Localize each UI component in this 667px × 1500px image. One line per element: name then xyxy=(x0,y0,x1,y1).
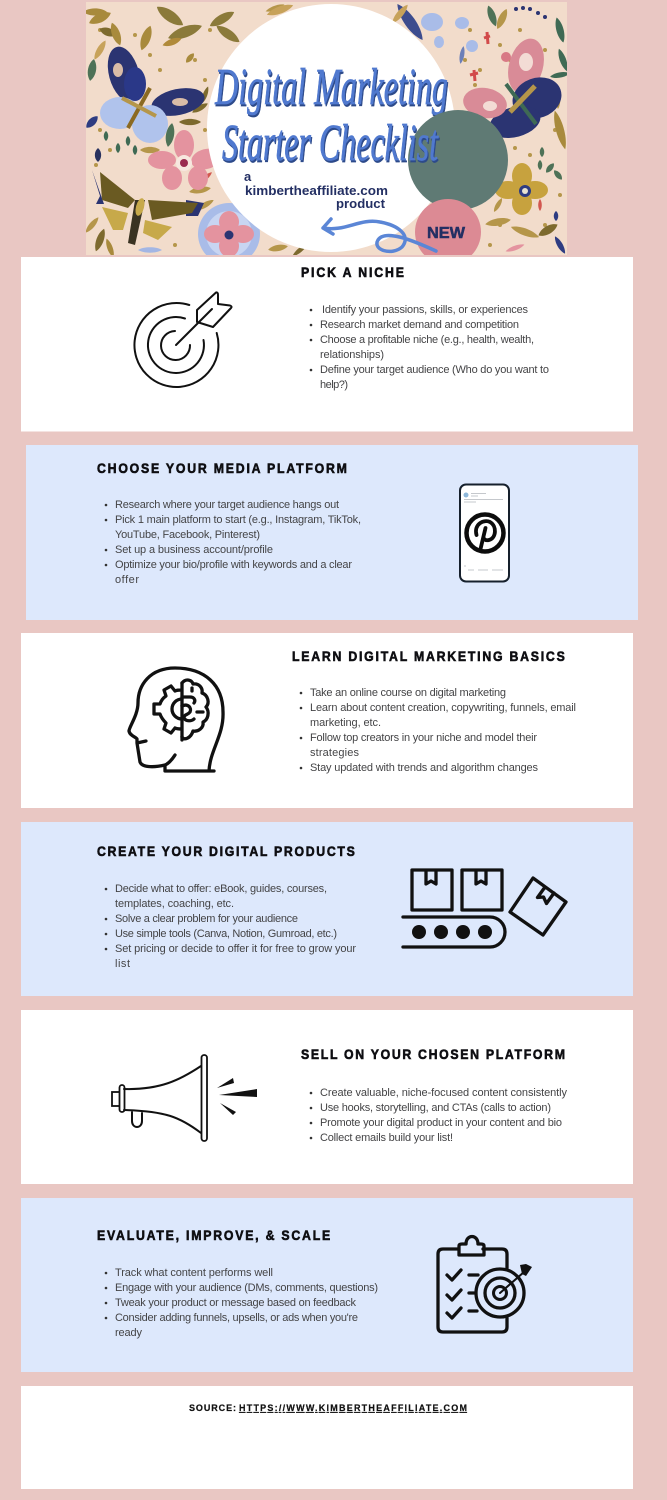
source line: HTTPS://WWW.KIMBERTHEAFFILIATE.COM xyxy=(239,1403,467,1413)
bullet list: Track what content performs well xyxy=(115,1267,273,1279)
grey-green circle xyxy=(408,110,508,210)
bullet list: Collect emails build your list! xyxy=(320,1132,453,1144)
white circle xyxy=(207,4,455,252)
banner: floral header xyxy=(83,1,570,265)
bullet list: Use hooks, storytelling, and CTAs (calls to action) xyxy=(320,1102,551,1114)
bullet list xyxy=(105,1267,378,1339)
bullet list: ready xyxy=(115,1327,142,1339)
banner title line 2: Starter Checklist xyxy=(223,117,440,174)
bullet list: Decide what to offer: eBook, guides, courses, xyxy=(115,883,327,895)
bullet list xyxy=(300,687,576,774)
bullet list: Pick 1 main platform to start (e.g., Instagram, TikTok, xyxy=(115,514,361,526)
banner title line 2: Starter Checklist xyxy=(222,115,439,172)
heading: CHOOSE YOUR MEDIA PLATFORM xyxy=(97,460,347,476)
bullet list: Stay updated with trends and algorithm changes xyxy=(310,762,538,774)
flower: pink xyxy=(148,130,214,190)
banner byline: kimbertheaffiliate.com xyxy=(245,183,388,198)
icon: megaphone xyxy=(112,1055,257,1141)
bullet list: templates, coaching, etc. xyxy=(115,898,234,910)
bullet list: Optimize your bio/profile with keywords and a clear xyxy=(115,559,352,571)
bullet list: Define your target audience (Who do you want to xyxy=(320,364,549,376)
source line: SOURCE: xyxy=(189,1403,236,1413)
bullet list: marketing, etc. xyxy=(310,717,381,729)
bullet list xyxy=(105,499,361,586)
icon: head with gear and brain xyxy=(129,668,223,771)
heading: SELL ON YOUR CHOSEN PLATFORM xyxy=(301,1046,565,1062)
bullet list: Create valuable, niche-focused content consistently xyxy=(320,1087,568,1099)
bullet list: help?) xyxy=(320,379,348,391)
bullet list: strategies xyxy=(310,747,360,759)
banner byline xyxy=(244,174,388,210)
moth xyxy=(92,170,204,245)
flower: gold xyxy=(495,163,548,215)
banner title line 1 shadow and text: Digital Marketing xyxy=(214,59,448,116)
panel: pick a niche xyxy=(21,257,633,432)
bullet list: Set pricing or decide to offer it for free to grow your xyxy=(115,943,356,955)
banner title line 1 shadow and text xyxy=(214,68,448,118)
icon: phone with pinterest logo xyxy=(460,484,509,582)
banner title line 1 shadow and text: Digital Marketing xyxy=(215,61,449,118)
bullet list: relationships) xyxy=(320,349,384,361)
bullet list: Use simple tools (Canva, Notion, Gumroad, etc.) xyxy=(115,928,337,940)
heading: EVALUATE, IMPROVE, & SCALE xyxy=(97,1227,330,1243)
panel: choose your media platform xyxy=(26,445,638,620)
panel: create your digital products xyxy=(21,822,633,996)
panel: learn digital marketing basics xyxy=(21,633,633,808)
butterfly: navy and lilac xyxy=(100,43,207,143)
panel: sell on your chosen platform xyxy=(21,1010,633,1184)
bullet list: Solve a clear problem for your audience xyxy=(115,913,298,925)
bullet list: Choose a profitable niche (e.g., health, wealth, xyxy=(320,334,534,346)
blue scribble arrow xyxy=(323,219,436,251)
pink NEW circle xyxy=(415,199,481,255)
panel: source xyxy=(21,1386,633,1489)
heading: PICK A NICHE xyxy=(301,264,404,280)
bullet list: Take an online course on digital marketing xyxy=(310,687,506,699)
banner title line 2 xyxy=(222,124,440,163)
banner byline: product xyxy=(336,196,386,211)
bullet list: YouTube, Facebook, Pinterest) xyxy=(115,529,260,541)
bullet list: list xyxy=(115,958,130,970)
heading: LEARN DIGITAL MARKETING BASICS xyxy=(292,648,565,664)
flower: lilac xyxy=(198,203,260,255)
NEW label: NEW xyxy=(427,225,466,242)
bullet list: Follow top creators in your niche and model their xyxy=(310,732,537,744)
icon: target with arrow xyxy=(134,292,232,387)
butterfly: pink and navy xyxy=(463,38,562,138)
icon: conveyor belt with boxes xyxy=(403,870,566,947)
bullet list xyxy=(105,883,356,970)
bullet list: Set up a business account/profile xyxy=(115,544,273,556)
bullet list: offer xyxy=(115,574,139,586)
bullet list: Research market demand and competition xyxy=(320,319,519,331)
banner byline: a xyxy=(244,169,252,184)
bullet list: Consider adding funnels, upsells, or ads when you're xyxy=(115,1312,358,1324)
panel: evaluate, improve and scale xyxy=(21,1198,633,1372)
bullet list: Promote your digital product in your content and bio xyxy=(320,1117,562,1129)
bullet list: Tweak your product or message based on feedback xyxy=(115,1297,356,1309)
heading: CREATE YOUR DIGITAL PRODUCTS xyxy=(97,843,355,859)
bullet list: Identify your passions, skills, or experiences xyxy=(322,304,528,316)
bullet list: Engage with your audience (DMs, comments, questions) xyxy=(115,1282,378,1294)
bullet list: Learn about content creation, copywriting, funnels, email xyxy=(310,702,576,714)
bullet list: Research where your target audience hangs out xyxy=(115,499,339,511)
bullet list xyxy=(310,304,549,391)
icon: clipboard with target xyxy=(438,1236,532,1332)
bullet list xyxy=(310,1087,568,1144)
